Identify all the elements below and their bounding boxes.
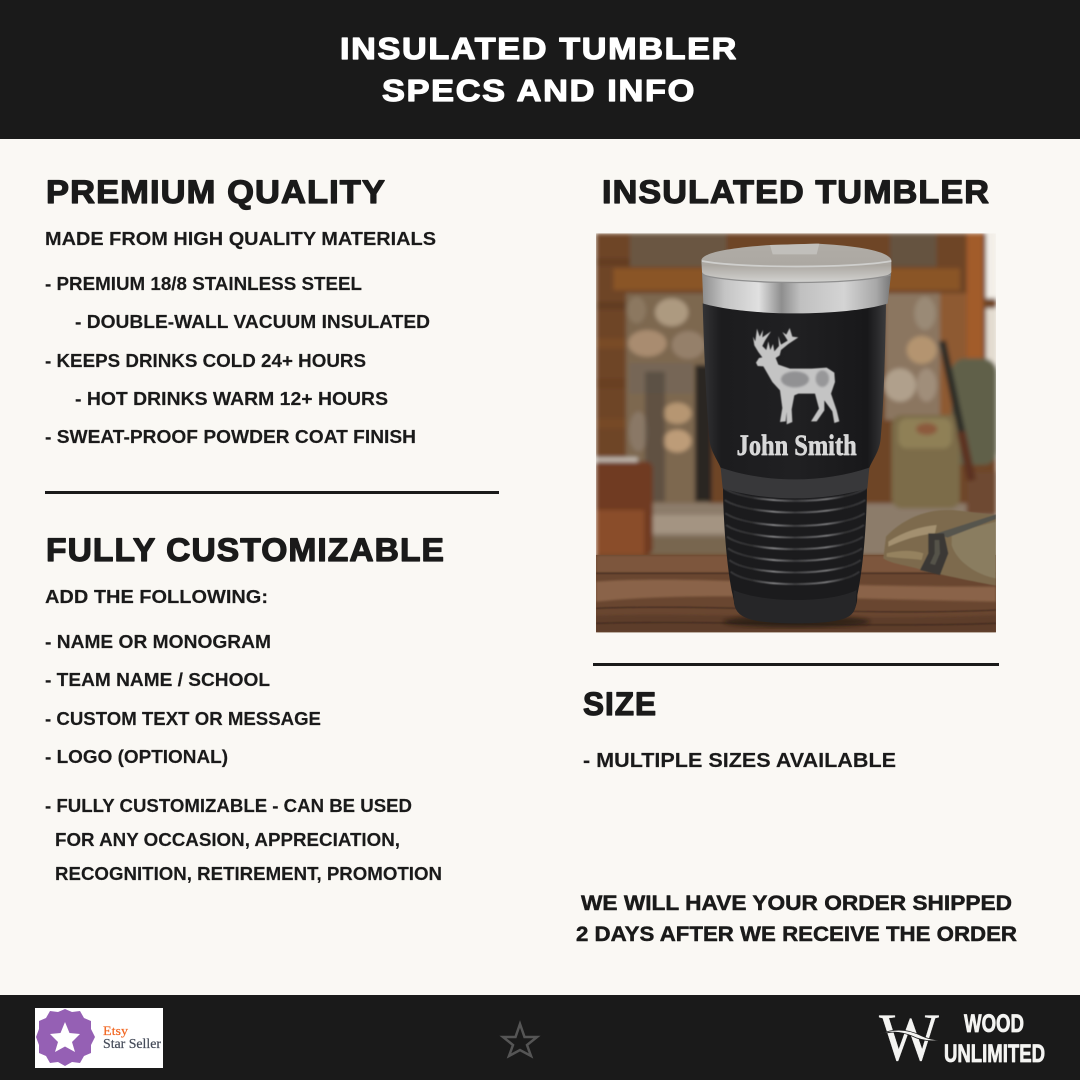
panel: fully customizable <box>45 532 445 884</box>
feature: vacuum insulated: - DOUBLE-WALL VACUUM INSULATED <box>75 311 430 332</box>
badge: etsy star seller <box>35 1008 163 1068</box>
feature: stainless steel: - PREMIUM 18/8 STAINLESS STEEL <box>45 273 362 294</box>
occasion note: RECOGNITION, RETIREMENT, PROMOTION <box>55 863 442 884</box>
base cup <box>733 590 857 623</box>
clear lid <box>701 244 891 283</box>
badge text: etsy: Etsy <box>103 1023 129 1038</box>
logo mark W: W <box>879 999 940 1075</box>
engraved name: John Smith <box>737 430 857 462</box>
icon: purple rosette with star <box>36 1009 95 1066</box>
tumbler lower ribbed base <box>723 488 867 608</box>
gloves <box>883 510 996 586</box>
option: name: - NAME OR MONOGRAM <box>45 631 271 652</box>
option: team: - TEAM NAME / SCHOOL <box>45 669 270 690</box>
title line 1: INSULATED TUMBLER <box>340 31 738 66</box>
header band <box>0 0 1080 139</box>
logo word: unlimited: UNLIMITED <box>944 1040 1045 1068</box>
wooden table <box>596 555 996 632</box>
heading: insulated tumbler: INSULATED TUMBLER <box>602 174 990 210</box>
intro line: MADE FROM HIGH QUALITY MATERIALS <box>45 228 436 249</box>
engraved deer <box>753 328 839 424</box>
logo: wood unlimited <box>878 999 1045 1075</box>
badge text: star seller: Star Seller <box>103 1036 162 1051</box>
heading: premium quality: PREMIUM QUALITY <box>46 174 386 210</box>
feature: cold drinks: - KEEPS DRINKS COLD 24+ HOURS <box>45 350 366 371</box>
footer band <box>0 995 1080 1080</box>
option: logo: - LOGO (OPTIONAL) <box>45 746 228 767</box>
occasion note <box>45 795 442 884</box>
panel: size <box>583 686 896 772</box>
title line 2: SPECS AND INFO <box>382 73 696 108</box>
tumbler shadow <box>723 616 870 628</box>
tumbler ribs <box>724 488 866 584</box>
occasion note: - FULLY CUSTOMIZABLE - CAN BE USED <box>45 795 412 816</box>
intro line: ADD THE FOLLOWING: <box>45 586 268 607</box>
heading: size: SIZE <box>583 686 657 722</box>
panel: premium quality <box>45 174 436 447</box>
product photo: engraved tumbler <box>596 233 997 632</box>
size note: - MULTIPLE SIZES AVAILABLE <box>583 749 896 772</box>
option: custom text: - CUSTOM TEXT OR MESSAGE <box>45 708 321 729</box>
shipping note: 2 DAYS AFTER WE RECEIVE THE ORDER <box>576 922 1017 946</box>
feature: hot drinks: - HOT DRINKS WARM 12+ HOURS <box>75 388 388 409</box>
feature: powder coat: - SWEAT-PROOF POWDER COAT FINISH <box>45 426 416 447</box>
logo swoosh <box>878 1030 941 1041</box>
tumbler <box>701 244 891 628</box>
photo backdrop <box>596 233 997 632</box>
steel rim band <box>702 272 891 313</box>
occasion note: FOR ANY OCCASION, APPRECIATION, <box>55 829 400 850</box>
heading: fully customizable: FULLY CUSTOMIZABLE <box>46 532 445 568</box>
shipping note: WE WILL HAVE YOUR ORDER SHIPPED <box>581 891 1012 915</box>
logo word: wood: WOOD <box>964 1010 1024 1038</box>
icon: outlined star <box>503 1024 537 1056</box>
shipping note <box>576 891 1017 946</box>
tumbler upper body <box>703 303 886 487</box>
